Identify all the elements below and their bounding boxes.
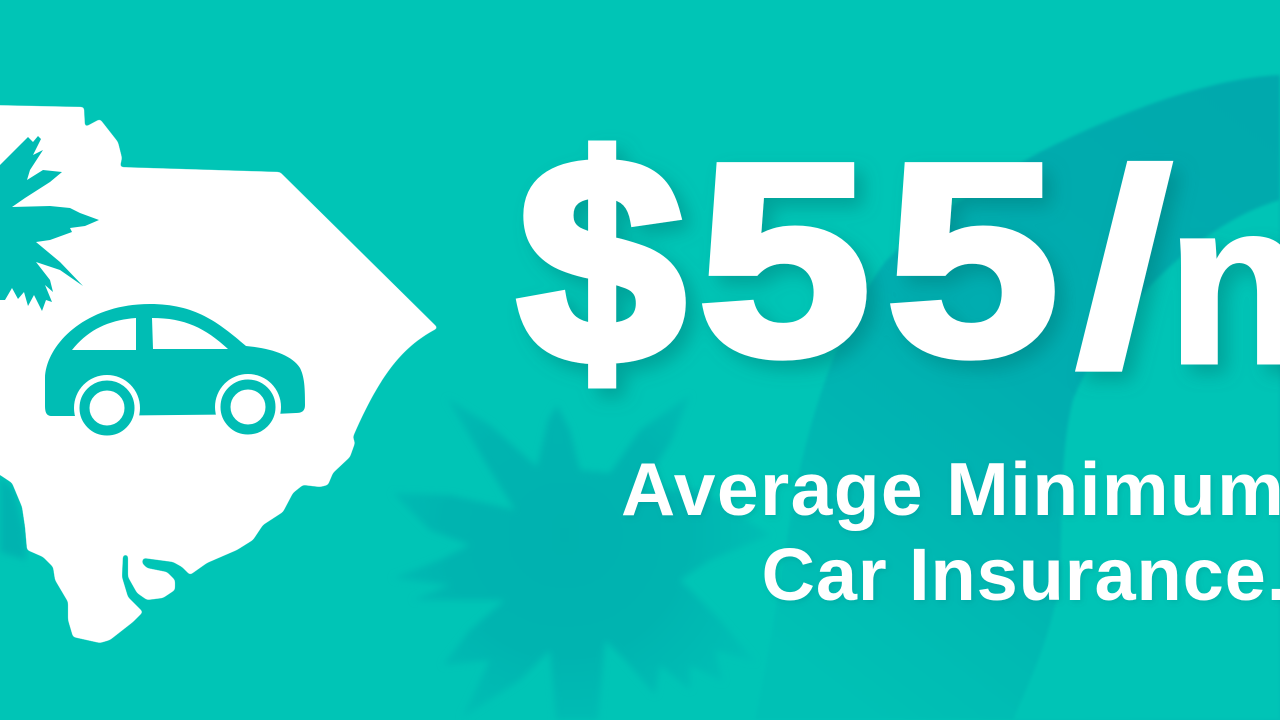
dollar sign: $ — [519, 100, 684, 423]
front wheel — [215, 374, 281, 440]
subheading line 2: Car Insurance. — [762, 533, 1280, 616]
headline price — [519, 100, 1280, 424]
car windows — [72, 318, 228, 350]
subheading line 1: Average Minimum — [621, 447, 1280, 531]
palm tree silhouette, background — [393, 395, 770, 720]
icon: car — [45, 304, 305, 441]
slash: / — [1074, 112, 1176, 424]
lighter overlapping shape — [1013, 200, 1280, 720]
South Carolina state map — [0, 105, 438, 643]
digits: 55 — [698, 108, 1059, 413]
background blob — [755, 75, 1280, 720]
subheading — [621, 447, 1280, 616]
palm tree silhouette, lower-left edge — [0, 476, 26, 560]
palm tree cut-out on the map — [0, 136, 99, 311]
rear wheel — [74, 375, 140, 441]
